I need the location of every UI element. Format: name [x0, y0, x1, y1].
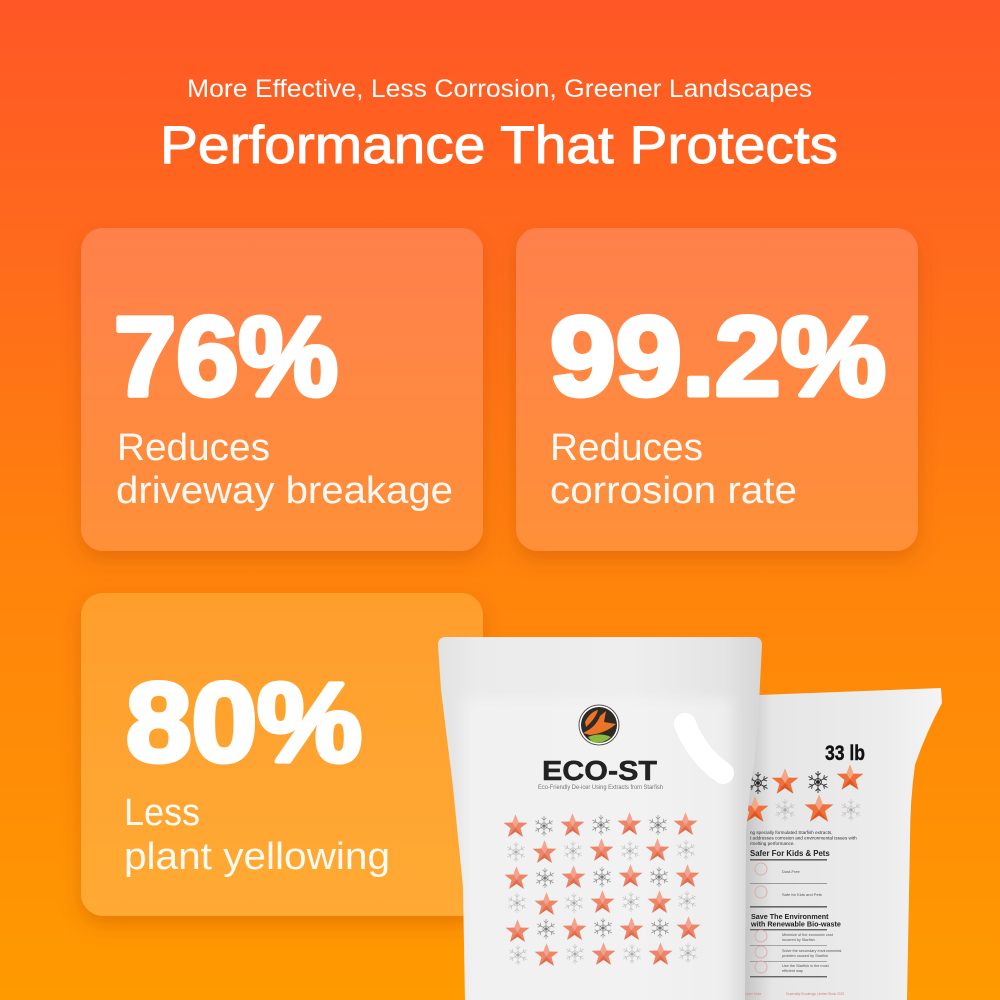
- description: corrosion rate: corrosion rate: [550, 470, 797, 512]
- safer list: Safe for Kids and Pets: [782, 892, 822, 897]
- title: Performance That Protects: [160, 116, 838, 175]
- description: corrosion rate: [550, 427, 797, 512]
- footer lines: [745, 992, 844, 996]
- footer lines: Learn More: [745, 992, 762, 996]
- panel: driveway breakage stat: [81, 228, 483, 551]
- description: plant yellowing: plant yellowing: [124, 836, 390, 878]
- description: driveway breakage: Reduces: [117, 427, 270, 469]
- environment list: problem caused by Starfish: [782, 954, 828, 958]
- description text: [750, 830, 857, 846]
- safer list: Dust-Free: [782, 869, 801, 874]
- panel: plant yellowing stat: [81, 593, 483, 916]
- logo: [579, 705, 619, 745]
- stat: 80%: 80%: [126, 660, 362, 785]
- environment list: Minimize of the economic cost: [782, 933, 834, 937]
- back product bag: [742, 688, 942, 1000]
- description text: rmelting performance.: [750, 841, 795, 846]
- heading: safer for kids and pets: Safer For Kids & Pets: [750, 849, 830, 858]
- heading: save the environment: [750, 912, 841, 928]
- subtitle: More Effective, Less Corrosion, Greener Landscapes: [187, 75, 812, 103]
- description: driveway breakage: [116, 427, 453, 512]
- bag weight label: 33 lb: [825, 742, 865, 765]
- description: plant yellowing: [124, 792, 390, 878]
- safer list: [750, 859, 827, 908]
- handle cutout: [685, 724, 723, 773]
- tagline: Eco-Friendly De-icer Using Extracts from Starfish: [538, 784, 663, 791]
- environment list: Use the Starfish in the most: [782, 964, 830, 968]
- environment list: [750, 929, 841, 977]
- footer lines: Especially Ecodesign Limited Stock 2023: [786, 992, 844, 996]
- bag body: [438, 637, 762, 1000]
- heading: save the environment: with Renewable Bio-waste: [750, 920, 841, 928]
- environment list: incurred by Starfish: [782, 938, 815, 942]
- description: driveway breakage: driveway breakage: [116, 470, 453, 512]
- description text: t addresses corrosion and environmental issues with: [750, 836, 857, 840]
- stat: 76%: 76%: [114, 294, 338, 419]
- brand name: ECO-ST: [542, 755, 657, 786]
- description text: ng specially formulated Starfish extracts,: [750, 830, 832, 835]
- description: plant yellowing: Less: [124, 792, 200, 834]
- front product bag: [438, 637, 762, 1000]
- stat: 99.2%: 99.2%: [550, 294, 886, 419]
- star and snowflake pattern: [504, 813, 700, 966]
- heading: save the environment: Save The Environment: [751, 912, 829, 921]
- star and snowflake pattern: [742, 765, 863, 822]
- bag inner texture panel: [462, 698, 732, 1000]
- environment list: efficient way: [782, 969, 803, 973]
- description: corrosion rate: Reduces: [550, 427, 703, 469]
- environment list: Solve the secondary environmental: [782, 949, 841, 953]
- panel: corrosion rate stat: [516, 228, 918, 551]
